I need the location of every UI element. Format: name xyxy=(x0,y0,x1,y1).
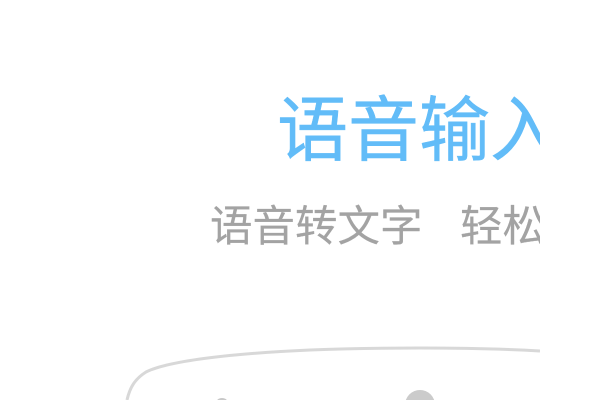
phone outline xyxy=(127,348,540,400)
icon: left key xyxy=(217,398,227,400)
subtitle: 语音转文字 轻松 xyxy=(210,204,540,251)
icon: microphone button xyxy=(405,390,435,400)
